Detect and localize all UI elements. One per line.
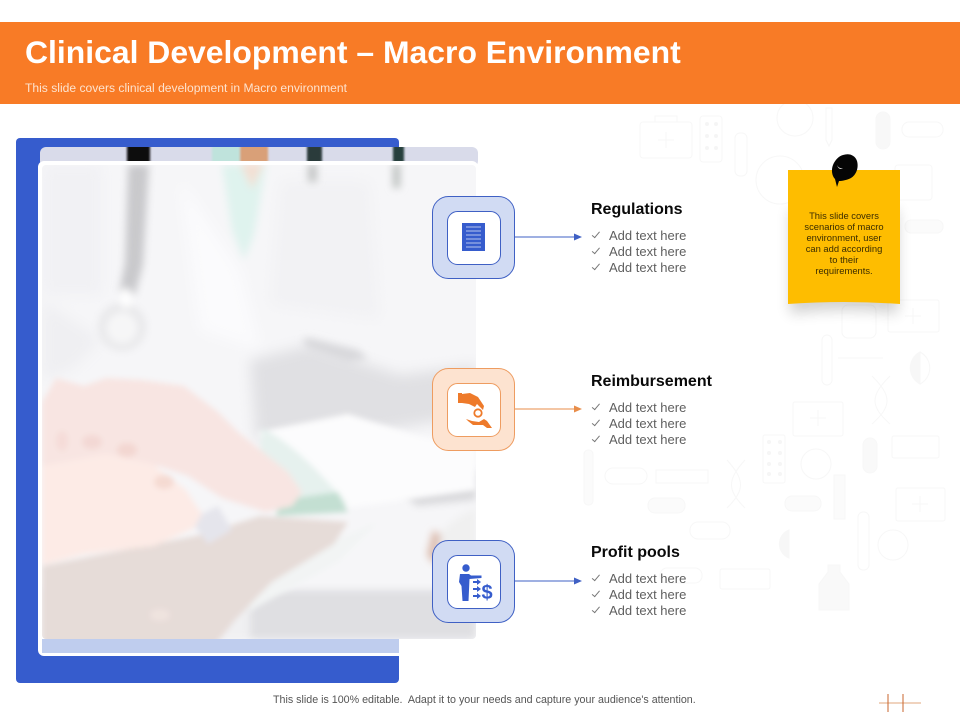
sticky note text [804,210,884,276]
footer note: This slide is 100% editable. Adapt it to your needs and capture your audience's attention. [273,694,696,706]
heading: regulations: Regulations [591,201,683,218]
icon card: profit pools person and dollar: $ [482,582,493,604]
sticky note text: to their [830,254,858,265]
list: regulations [592,228,686,275]
list: reimbursement: Add text here [609,400,686,415]
list: reimbursement [592,400,686,447]
sticky note text: requirements. [815,265,873,276]
list: regulations: Add text here [609,228,686,243]
header band [0,22,960,104]
subtitle: This slide covers clinical development in Macro environment [25,81,347,95]
list: profit pools: Add text here [609,587,686,602]
heading: reimbursement: Reimbursement [591,373,712,390]
list: profit pools: Add text here [609,603,686,618]
sticky note text: This slide covers [809,210,879,221]
sticky note text: environment, user [806,232,882,243]
list: regulations: Add text here [609,244,686,259]
list: profit pools [592,571,686,618]
sticky note text: can add according [806,243,882,254]
sticky note text: scenarios of macro [804,221,884,232]
list: profit pools: Add text here [609,571,686,586]
sticky note [784,154,904,318]
list: regulations: Add text here [609,260,686,275]
list: reimbursement: Add text here [609,432,686,447]
heading: profit pools: Profit pools [591,544,680,561]
photo: doctor holding patient's hands [38,147,478,656]
title: Clinical Development – Macro Environment [25,34,681,70]
blue backing panel [16,138,399,683]
list: reimbursement: Add text here [609,416,686,431]
